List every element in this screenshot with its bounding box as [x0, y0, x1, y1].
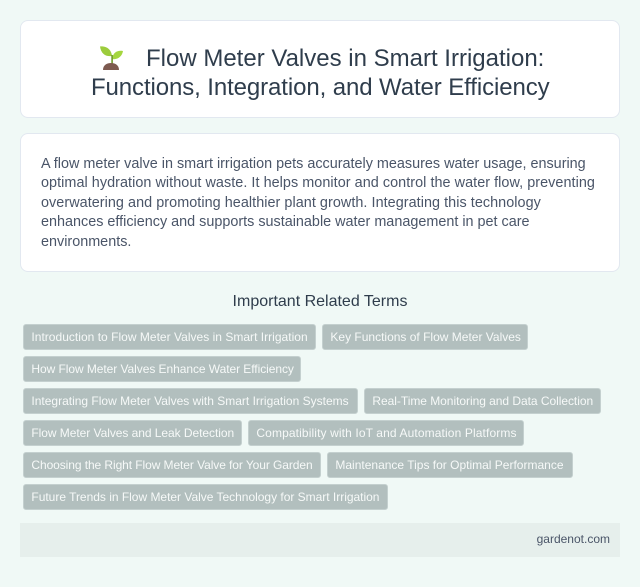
footer source text: gardenot.com [537, 532, 610, 546]
tag [23, 356, 301, 382]
intro paragraph [41, 156, 595, 250]
title [91, 45, 550, 101]
title: Functions, Integration, and Water Efficiency [91, 74, 550, 101]
title: Flow Meter Valves in Smart Irrigation: [146, 45, 544, 72]
tag [23, 420, 242, 446]
tag [248, 420, 524, 446]
tag: Key Functions of Flow Meter Valves [330, 330, 521, 344]
tag [23, 484, 388, 510]
panel: intro text card [20, 133, 620, 272]
intro paragraph: optimal hydration without waste. It helps monitor and control the water flow, preventing [41, 175, 595, 191]
tag: Future Trends in Flow Meter Valve Technology for Smart Irrigation [31, 490, 379, 504]
tag: Compatibility with IoT and Automation Platforms [256, 426, 517, 440]
tag: Integrating Flow Meter Valves with Smart Irrigation Systems [31, 394, 349, 408]
tag: Introduction to Flow Meter Valves in Smart Irrigation [31, 330, 308, 344]
panel: related terms tags [23, 324, 601, 510]
tag: Choosing the Right Flow Meter Valve for Your Garden [31, 458, 313, 472]
intro paragraph: enhances efficiency and supports sustainable water management in pet care [41, 214, 530, 230]
icon: seedling [100, 46, 123, 70]
tag [327, 452, 573, 478]
panel: header card [20, 20, 620, 118]
tag: Maintenance Tips for Optimal Performance [335, 458, 564, 472]
tag [364, 388, 601, 414]
heading: important related terms: Important Related Terms [233, 293, 407, 310]
tag [23, 452, 321, 478]
footer bar [20, 523, 620, 557]
tag [322, 324, 528, 350]
tag: How Flow Meter Valves Enhance Water Efficiency [31, 362, 294, 376]
tag [23, 388, 358, 414]
tag: Real-Time Monitoring and Data Collection [372, 394, 593, 408]
intro paragraph: A flow meter valve in smart irrigation pets accurately measures water usage, ensuring [41, 156, 586, 172]
intro paragraph: environments. [41, 234, 131, 250]
tag [23, 324, 316, 350]
intro paragraph: overwatering and promoting healthier plant growth. Integrating this technology [41, 194, 541, 210]
tag: Flow Meter Valves and Leak Detection [31, 426, 234, 440]
